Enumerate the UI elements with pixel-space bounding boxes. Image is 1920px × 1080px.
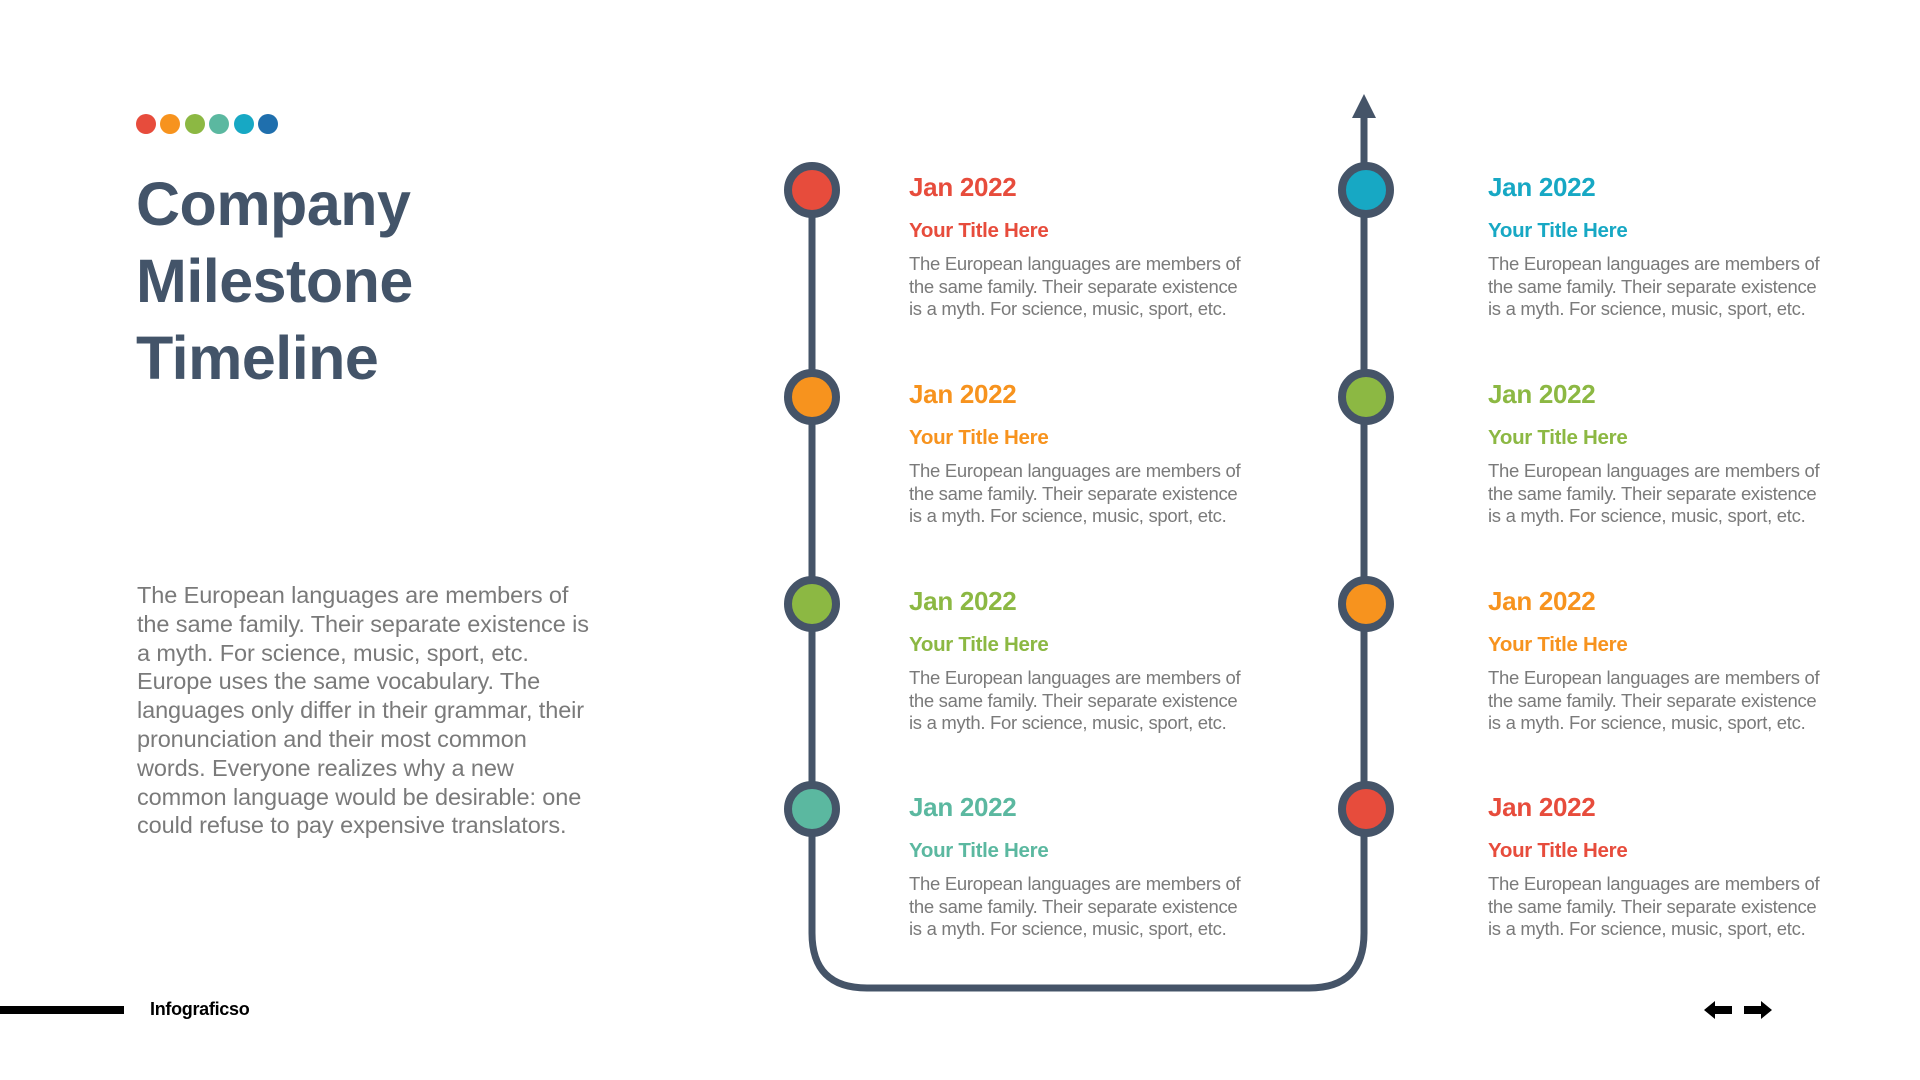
milestone 5: the same family. Their separate existence (1488, 276, 1816, 296)
arrow head (1352, 94, 1376, 118)
milestone 4: is a myth. For science, music, sport, etc. (909, 918, 1226, 939)
milestone 8: Your Title Here (1488, 839, 1627, 862)
milestone 1: The European languages are members of (909, 253, 1240, 274)
title (136, 170, 413, 392)
milestone 1: Jan 2022 (909, 172, 1016, 202)
milestone 1: is a myth. For science, music, sport, etc. (909, 298, 1226, 319)
intro paragraph: a myth. For science, music, sport, etc. (137, 640, 529, 666)
milestone 4: the same family. Their separate existence (909, 896, 1237, 916)
intro paragraph: The European languages are members of (137, 582, 568, 608)
milestone 7: the same family. Their separate existence (1488, 690, 1816, 710)
milestone 5 (1488, 172, 1820, 319)
milestone 7 (1488, 586, 1820, 733)
title: Company (136, 170, 410, 238)
milestone 2: Jan 2022 (909, 379, 1016, 409)
intro paragraph: pronunciation and their most common (137, 726, 527, 752)
milestone 7: The European languages are members of (1488, 667, 1819, 688)
milestone 4: Your Title Here (909, 839, 1048, 862)
milestone 2: The European languages are members of (909, 460, 1240, 481)
milestone 3 (909, 586, 1241, 733)
milestone 6 (1488, 379, 1820, 526)
milestone 1: Your Title Here (909, 219, 1048, 242)
milestone 2: is a myth. For science, music, sport, etc. (909, 505, 1226, 526)
milestone 8: the same family. Their separate existence (1488, 896, 1816, 916)
milestone 1: the same family. Their separate existence (909, 276, 1237, 296)
milestone 1 (909, 172, 1241, 319)
milestone 2 (909, 379, 1241, 526)
milestone 8: The European languages are members of (1488, 873, 1819, 894)
milestone 7: Jan 2022 (1488, 586, 1595, 616)
milestone 3: Your Title Here (909, 633, 1048, 656)
milestone 4: Jan 2022 (909, 792, 1016, 822)
milestone 6: Your Title Here (1488, 426, 1627, 449)
nav arrows (1704, 1001, 1772, 1019)
milestone 5: Your Title Here (1488, 219, 1627, 242)
intro paragraph: could refuse to pay expensive translators. (137, 812, 566, 838)
milestone 6: Jan 2022 (1488, 379, 1595, 409)
milestone 8 (1488, 792, 1820, 939)
intro paragraph: common language would be desirable: one (137, 784, 581, 810)
milestone 5: Jan 2022 (1488, 172, 1595, 202)
milestone 7: is a myth. For science, music, sport, etc. (1488, 712, 1805, 733)
title: Milestone (136, 247, 413, 315)
intro paragraph: words. Everyone realizes why a new (137, 755, 514, 781)
milestone 8: is a myth. For science, music, sport, etc. (1488, 918, 1805, 939)
intro paragraph: Europe uses the same vocabulary. The (137, 668, 540, 694)
milestone 5: is a myth. For science, music, sport, etc. (1488, 298, 1805, 319)
intro paragraph (137, 582, 589, 838)
milestone 8: Jan 2022 (1488, 792, 1595, 822)
milestone 2: Your Title Here (909, 426, 1048, 449)
intro paragraph: the same family. Their separate existence is (137, 611, 589, 637)
milestone 6: is a myth. For science, music, sport, etc. (1488, 505, 1805, 526)
milestone 2: the same family. Their separate existence (909, 482, 1237, 504)
milestone 6: The European languages are members of (1488, 460, 1819, 481)
footer bar (0, 1006, 124, 1014)
milestone 3: Jan 2022 (909, 586, 1016, 616)
title: Timeline (136, 324, 378, 392)
footer brand: Infograficso (150, 999, 249, 1019)
milestone 7: Your Title Here (1488, 633, 1627, 656)
milestone 6: the same family. Their separate existence (1488, 482, 1816, 504)
intro paragraph: languages only differ in their grammar, their (137, 697, 584, 723)
milestone 3: The European languages are members of (909, 667, 1240, 688)
milestone 3: the same family. Their separate existence (909, 690, 1237, 710)
milestone 3: is a myth. For science, music, sport, etc. (909, 712, 1226, 733)
milestone 4: The European languages are members of (909, 873, 1240, 894)
milestone 4 (909, 792, 1241, 939)
milestone 5: The European languages are members of (1488, 253, 1819, 274)
color dots (136, 114, 278, 134)
